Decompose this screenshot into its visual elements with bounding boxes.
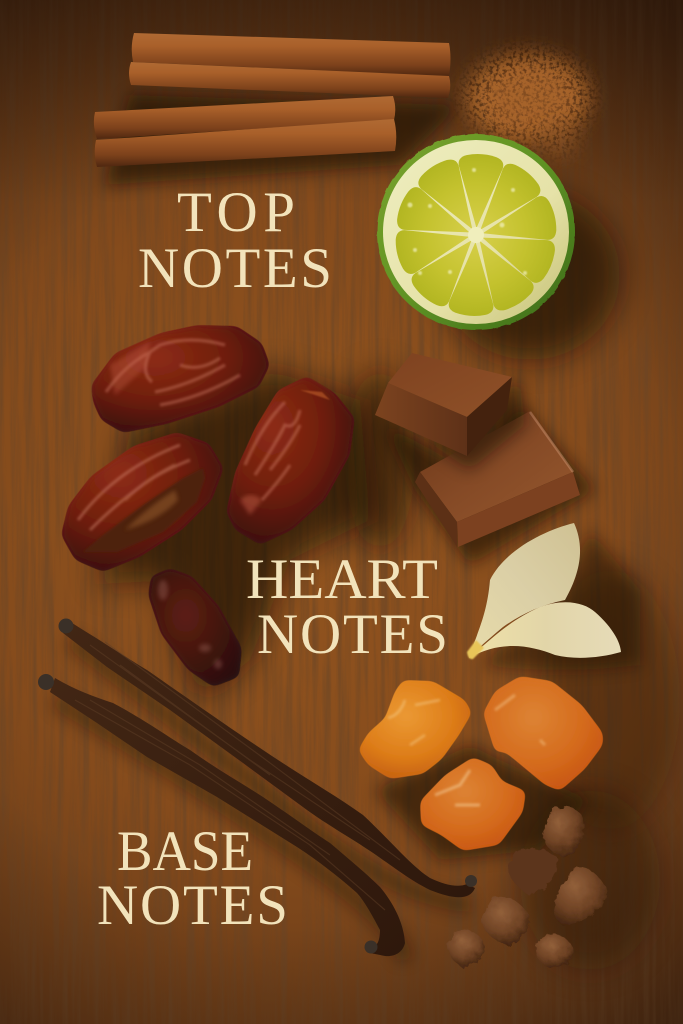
amber resin crystals [358,676,603,860]
white petals [467,523,640,670]
petal yellow tip [467,640,484,659]
lime pith [383,140,569,324]
large petal [469,523,580,658]
date top left [91,325,270,433]
date split flesh [83,468,205,552]
chocolate piece lower [415,411,580,547]
lime juice highlights [408,168,527,275]
chocolate pieces [375,353,595,565]
lime rind [377,134,575,330]
resin crystal left [358,680,472,779]
vanilla pods [38,618,477,960]
date left with split [61,432,224,572]
second cinnamon stick [129,62,450,98]
top notes heading [138,181,332,300]
third cinnamon stick [94,96,395,139]
lime slice [377,134,620,360]
top notes heading: TOP [177,181,295,244]
heart notes heading: NOTES [257,603,448,666]
heart notes heading [246,548,448,666]
lime segments [387,148,565,322]
lower petal [469,602,621,658]
top notes heading: NOTES [138,237,332,300]
resin crystal bottom [420,757,526,851]
vanilla pod upper [58,618,477,897]
brown resin lumps [448,807,607,968]
vanilla pod lower [38,674,405,956]
chocolate piece upper [375,353,512,456]
heart notes heading: HEART [246,548,438,611]
lower cinnamon stick [95,119,396,167]
base notes heading: BASE [117,820,253,883]
cinnamon powder [466,54,590,156]
base notes heading: NOTES [97,874,288,937]
base notes heading [97,820,288,937]
upper cinnamon stick [132,33,450,76]
shadow of upper piece [425,380,525,470]
dates [61,325,370,700]
small date [148,568,242,687]
cinnamon sticks [94,33,460,185]
resin crystal right [483,676,603,791]
date centre [226,376,355,545]
